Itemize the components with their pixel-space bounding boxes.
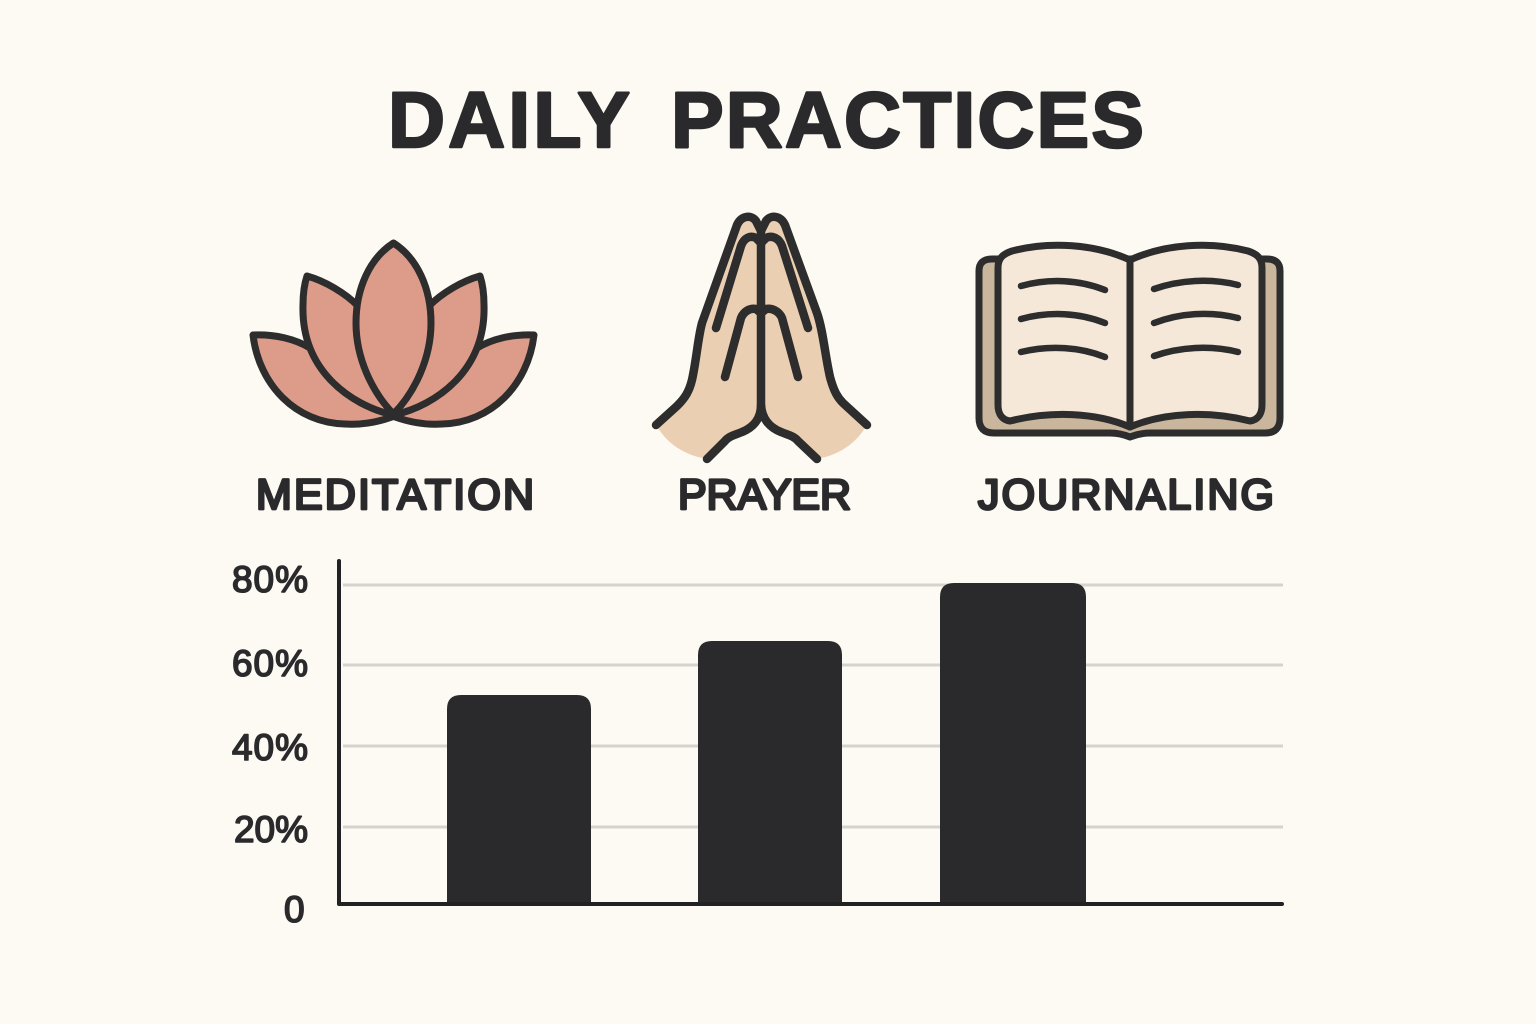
label: prayer: PRAYER	[678, 471, 851, 519]
label: journaling: JOURNALING	[978, 471, 1274, 519]
book text lines	[1021, 281, 1238, 357]
bar: meditation	[447, 695, 591, 904]
title	[388, 75, 1144, 164]
label: meditation: MEDITATION	[256, 471, 534, 519]
book pages	[998, 245, 1262, 427]
chart axes	[339, 561, 1282, 904]
y axis labels: 0	[284, 889, 305, 930]
book cover	[979, 259, 1280, 437]
y axis labels: 40%	[232, 727, 308, 768]
icon: open book (journaling)	[979, 245, 1280, 437]
y axis labels: 20%	[234, 809, 308, 850]
y axis labels: 80%	[232, 559, 308, 600]
icon: praying hands (prayer)	[656, 217, 867, 459]
bar: prayer	[698, 641, 842, 904]
book spine	[1126, 260, 1134, 427]
y axis labels	[232, 559, 308, 930]
hands fill	[656, 217, 867, 459]
title: DAILY	[388, 75, 630, 164]
bar: journaling	[940, 583, 1086, 904]
icon: lotus (meditation)	[253, 243, 534, 424]
y axis labels: 60%	[232, 643, 308, 684]
title: PRACTICES	[671, 75, 1144, 164]
bar chart	[232, 559, 1283, 930]
